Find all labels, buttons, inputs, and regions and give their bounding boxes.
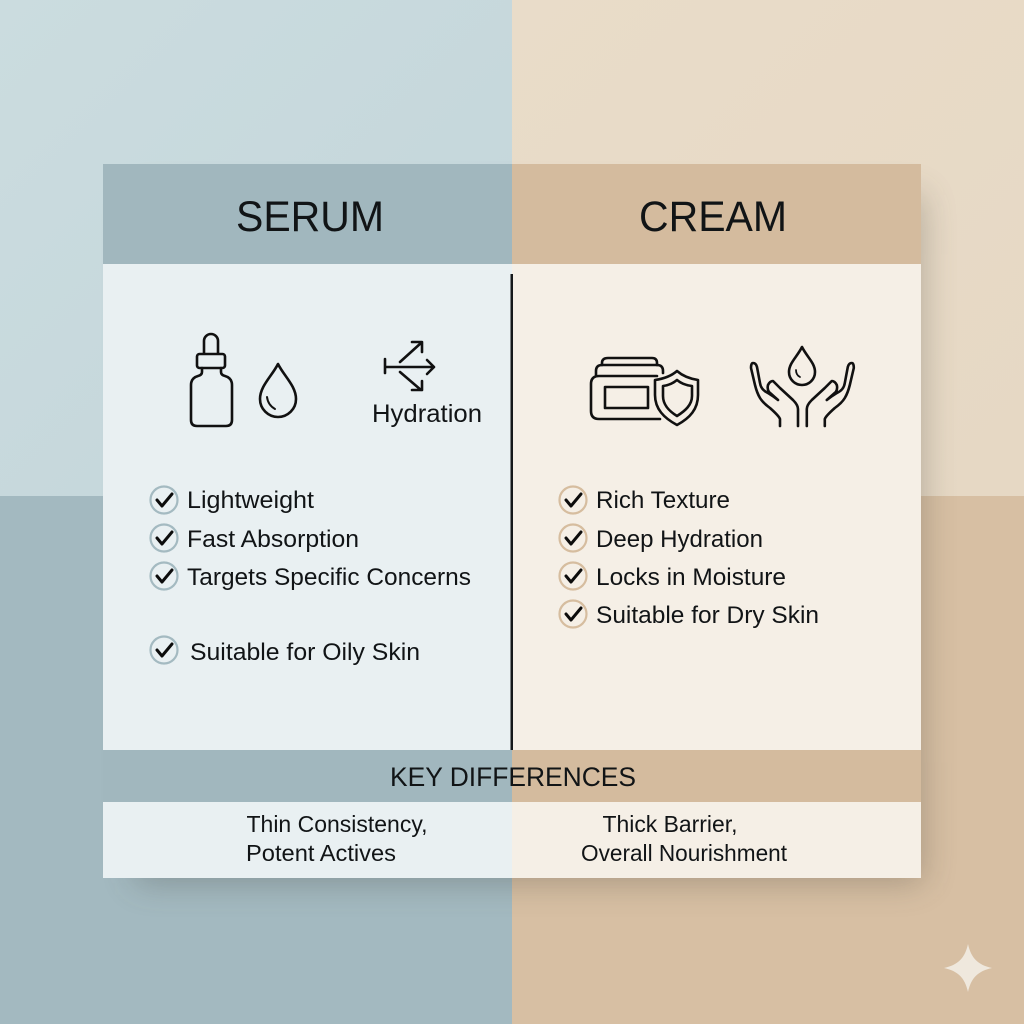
icon: dropper bottle: [191, 334, 232, 426]
header: cream: CREAM: [639, 193, 787, 241]
item: locks in moisture: Locks in Moisture: [596, 564, 786, 591]
header: cream: [512, 164, 921, 264]
label: hydration: Hydration: [372, 400, 482, 428]
card shadow: [135, 195, 923, 883]
header: serum: SERUM: [236, 193, 384, 241]
icon: hydration arrows: [385, 342, 434, 390]
panel: serum key difference: Potent Actives: [246, 840, 396, 866]
panel: cream key difference: [512, 802, 921, 878]
banner: key differences: KEY DIFFERENCES: [390, 762, 636, 792]
list: serum benefits: [150, 486, 471, 666]
item: lightweight: Lightweight: [187, 487, 314, 514]
item: deep hydration: Deep Hydration: [596, 526, 763, 553]
icon: hands holding drop: [751, 347, 854, 426]
item: rich texture: Rich Texture: [596, 487, 730, 514]
icon: cream jar with shield: [591, 358, 698, 425]
item: targets specific concerns: Targets Specific Concerns: [187, 564, 471, 591]
panel: cream body: [512, 264, 921, 750]
icon: sparkle watermark: [944, 944, 992, 992]
icon: water drop: [260, 364, 296, 417]
panel: serum body: [103, 264, 512, 750]
panel: cream key difference: Thick Barrier,: [602, 811, 738, 837]
banner: key differences: [103, 750, 921, 802]
panel: serum key difference: [103, 802, 512, 878]
item: fast absorption: Fast Absorption: [187, 526, 359, 553]
item: suitable for oily skin: Suitable for Oily Skin: [190, 639, 420, 666]
center divider: [510, 274, 513, 750]
panel: serum key difference: Thin Consistency,: [246, 811, 428, 837]
list: cream benefits: [560, 486, 819, 629]
item: suitable for dry skin: Suitable for Dry Skin: [596, 602, 819, 629]
panel: cream key difference: Overall Nourishment: [581, 840, 788, 866]
header: serum: [103, 164, 512, 264]
panel: comparison card: [103, 164, 921, 878]
